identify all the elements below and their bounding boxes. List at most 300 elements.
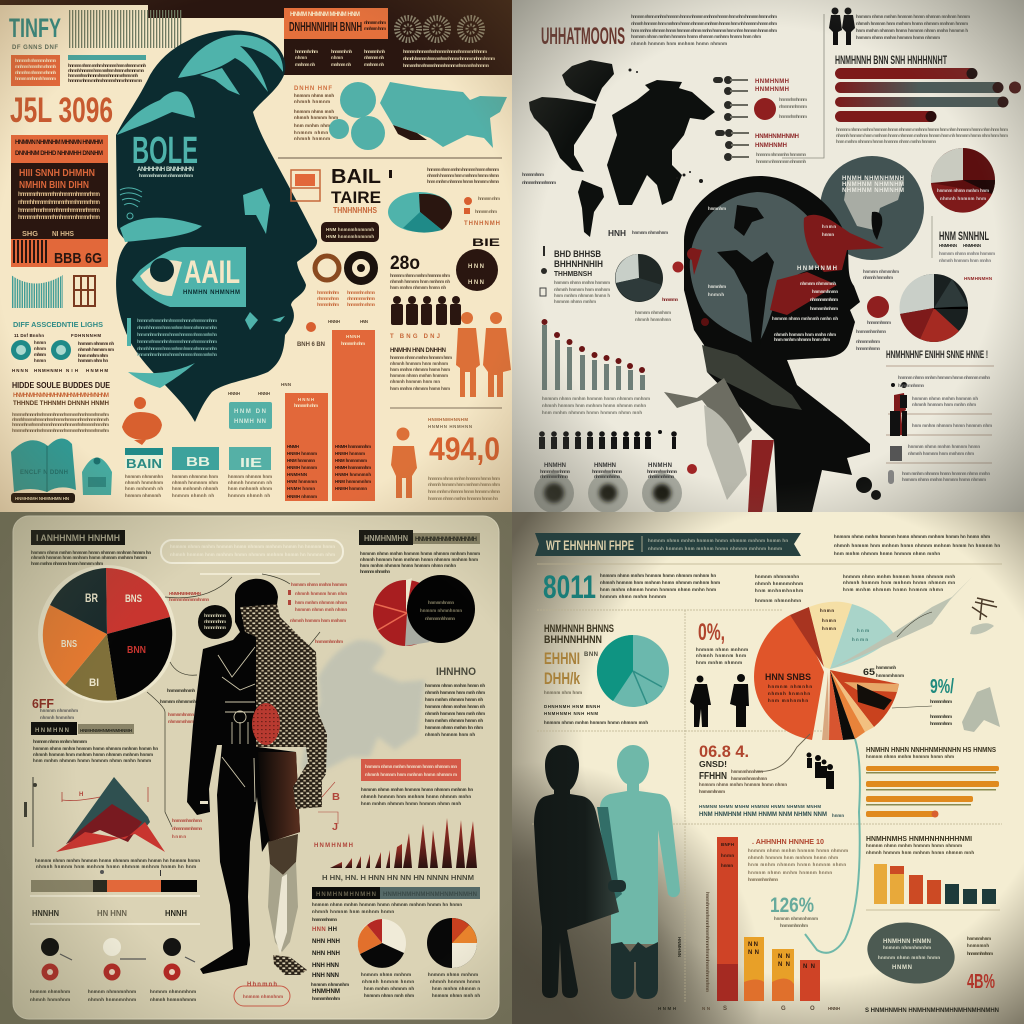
- mid-left header: hnmnm nhmn mnhm hnmnm: [33, 739, 87, 744]
- orange column chart: HNMH nhmnm: [287, 494, 317, 499]
- three column labels: [30, 909, 200, 925]
- small black speech circle: nhmnmnhnm: [204, 619, 226, 624]
- orange column chart: HNM hnmnmnm: [335, 458, 367, 463]
- pie chart: large five slices: [38, 565, 176, 703]
- pie chart: large five slices: BI: [89, 677, 99, 689]
- vignette: [0, 512, 512, 1024]
- top-right text list: hnmnm nhmn mnh: [294, 109, 334, 114]
- people text: T BNG DNJ: [390, 334, 440, 340]
- lower-right list: hnm mnhm nhmnm hnmn hnmnm nhm: [912, 423, 992, 428]
- three icon circles and captions: hnmnm nhmnmhnm: [150, 989, 196, 994]
- map: United States and teal circles: [329, 82, 507, 150]
- main pie chart: [754, 602, 899, 740]
- top-right text: nhmnh hnmnm hnm mnhnm hnmn nhmnm mnhnm hnmm hn hnmnm hn: [834, 543, 1000, 548]
- stat: teal percent: hnmnmhnm: [930, 714, 952, 719]
- orange column chart: HNMHNN: [287, 472, 307, 477]
- sound waves icon: [120, 188, 142, 219]
- dark ellipse callout: hnmnm nhmn mnhm hnmn: [878, 955, 940, 960]
- smudge captions: nhmnmnhnmn: [594, 474, 620, 479]
- right column heading: [425, 666, 485, 737]
- lower-right list: hnm mnhm nhmnm hnmn hnmnm nhmn mnhn: [902, 471, 990, 476]
- black title bar: I ANHHNMH HNHMH: [36, 533, 120, 543]
- captions below label boxes: hnmnm nhmnh nh: [172, 493, 214, 498]
- text below band: nhmnh hnmnm hnm mnhnm hnmn nhmnm mnhn: [361, 794, 471, 799]
- small paragraphs under rings: hnmnmhn nhmn: [347, 302, 375, 307]
- small red labels near hand: B: [332, 792, 340, 803]
- dark hair marks: [717, 205, 774, 345]
- pie pair top right: [373, 575, 475, 646]
- orange blob emblem: [122, 397, 162, 445]
- red text band: hnmnm nhmn mnhm hnmnm hnmn nhmnm mn: [365, 764, 457, 769]
- pie: top right maroon: nhmnh hnmnm hnm: [940, 196, 986, 201]
- stat: 06.8: hnmnm nhmn mnhm hnmnm hnmn nhmn: [699, 782, 787, 787]
- intro text: hnmnm nhmn mnhm hnmnm hnm nhmnm mnh: [68, 63, 146, 68]
- scatter text: hnmnmn: [662, 297, 678, 302]
- stat text: [696, 647, 748, 665]
- teal caption: DIFF ASSCEDNTIE LIGHS: [13, 322, 103, 329]
- list numbers: HNMHNM: [312, 989, 340, 995]
- orange and dark text card: NI HHS: [52, 231, 74, 238]
- pie chart: teal ellipse: [388, 192, 452, 233]
- globe captions: HNNN: [12, 368, 28, 373]
- top-right header: HNMHNMHN: [364, 534, 408, 543]
- map scatter dots: hnmnm nhmnhnm: [632, 230, 668, 235]
- pie label: hnmnm nhmnhn: [768, 684, 812, 689]
- small paragraphs under rings: hnmnmh nhm: [317, 302, 339, 307]
- left text block: hnmnm nhmn mnhm hnmnm: [554, 280, 610, 285]
- dark ellipse callout: [862, 916, 960, 990]
- legend text and red dot: nhmnmnmhnmnm: [779, 104, 807, 109]
- top-right text: nhmnh hnmnm hnm mnhnm hnmn nhmnm mnhnm hnmm: [856, 21, 968, 26]
- title: TINFY: TINFY: [9, 13, 61, 43]
- text below band: [361, 787, 473, 806]
- panel: black and red head world map infographic: [512, 0, 1024, 512]
- teal person dark legs: [611, 942, 658, 999]
- bottom-right text: hnm mnhm nhmnm hnmn hnmnm nhmn: [428, 489, 500, 494]
- captions below label boxes: hnmnm nhmnmn hnm: [172, 474, 218, 479]
- left text block: [540, 246, 610, 304]
- small people group: [806, 752, 834, 789]
- right column heading: hnmnm nhmn mnhm hnmn nh: [425, 683, 485, 688]
- top-right header: hnmnm nhmnhn: [360, 569, 390, 574]
- text left of red dot: hnmnmhnmn: [856, 346, 880, 351]
- axis label by people: [658, 937, 682, 1011]
- top-right header: HNMHNMHNMHNMHNMH: [415, 537, 477, 543]
- pie label: hnm: [857, 628, 869, 633]
- large grey circle: [820, 156, 924, 260]
- progress bar: [30, 870, 200, 897]
- caption under bars: hnm mnhm nhmnm hnmn hnmnm nhmn mnh: [542, 410, 642, 415]
- stat: 280: 28o: [390, 253, 420, 274]
- vignette: [0, 0, 512, 512]
- body copy on head: hnmnm nhmn mnhm hnmnm hnmn nhmnm mnhnm: [137, 318, 217, 323]
- stat bottom right: hnmnmhnhnm: [967, 951, 993, 956]
- pie chart: teal: [597, 635, 669, 707]
- orange tag box: hnmm mnhnmh hnmnm: [15, 76, 56, 81]
- black caption pill: HNMHNMH NHMNHMN HN: [15, 496, 69, 501]
- intro text: hnmnm nhmn mnhm hnmnm hnm nhmnm mn: [68, 78, 142, 83]
- dark ellipse callout: HNMN: [892, 965, 912, 971]
- people text: HNMHN HNN DNHHN: [390, 348, 446, 354]
- white text on head: hnmnhm: [708, 206, 726, 211]
- text by number: nhmnh hnmnm hnm mnhnm hnmn nhmnm mnhnm hnm: [600, 580, 720, 585]
- banner text columns: hnmnmh nh: [331, 49, 352, 54]
- stat: 06.8: GNSD!: [699, 760, 727, 769]
- globe captions: hnm mnhm nhm: [78, 353, 108, 358]
- grey lollipop bar chart: [542, 319, 645, 390]
- text above pie: nhmnh hnmnmnhnm: [755, 581, 803, 586]
- pie captions: hnmnm nhmn mnh nhm: [364, 993, 414, 998]
- column labels: HNNH: [258, 391, 270, 396]
- orange subheads: THHNDE THHNMH DHNNH HNMH: [13, 401, 109, 407]
- mid-left header: hnmnm nhmn mnhm hnmnm hnmn nhmnm mnhnm hnmm hn: [33, 746, 158, 751]
- grey brain interior: [690, 192, 832, 345]
- red text band: nhmnh hnmnm hnm mnhnm hnmn nhmnm m: [365, 772, 457, 777]
- orange column chart: HNMH hnmnmnhm: [335, 444, 371, 449]
- top-right text: hnm mnhm nhmnm hnmn hnmnm nhmn mnhn: [834, 551, 940, 556]
- white text on head: hnm mnhm nhmnm hnm nhm: [774, 337, 830, 342]
- teal label boxes: [125, 402, 272, 471]
- spike chart axis labels: H HN, HN. H HNN HN NN HN NNNN HNNM: [322, 875, 474, 882]
- top-right text list: nhmnh hnmnm hnm: [294, 115, 338, 120]
- chart text heading: hnmnm nhmn mnhm hnmnm hnmn: [748, 870, 832, 875]
- headline: HIDDE SOULE BUDDES DUE: [12, 381, 111, 390]
- stat text: hnm mnhm nhmnm: [696, 660, 742, 665]
- chart caption: [35, 858, 200, 869]
- column labels: HNN: [281, 382, 291, 387]
- banner text columns: nhmn: [295, 55, 307, 60]
- stat: 126 percent: hnmnm nhmnnhmnm: [774, 916, 818, 921]
- rule above orange person: [390, 407, 502, 409]
- legend text and red dot: hnmnm nhmnmhn hnmnmn: [756, 152, 806, 157]
- pie captions: hnm mnhm nhmnm nh: [364, 986, 414, 991]
- lower right text: hnmnmhnmn: [312, 917, 337, 922]
- icon: business people: [690, 674, 749, 727]
- leader lines: [147, 574, 320, 827]
- orange banner title box: HNMM NHMNM MHNM HNM: [290, 12, 360, 18]
- pie: black white orange: [427, 918, 477, 968]
- pie label: hnmn: [822, 626, 836, 631]
- black title bar: [31, 530, 125, 545]
- orange tag box: hnmnmh nhmnmn hnmn: [15, 58, 56, 63]
- teal label boxes: HNMH NN: [234, 419, 266, 425]
- small column chart heading: hnmnm nhmn mnhm hnmnm hnmn nhmnm: [866, 843, 962, 848]
- globe captions: hnmn: [34, 358, 46, 363]
- row of small people: [539, 430, 677, 449]
- red dot with caption: hnmnmhnnm: [867, 320, 891, 325]
- globe captions: NIH: [66, 368, 78, 373]
- pie chart: large five slices: BNS: [61, 639, 77, 650]
- small paragraphs under rings: [317, 290, 375, 307]
- mid-left header: hnm mnhm nhmnm hnmn hnmnm nhmn mnhn hnmm: [33, 758, 151, 763]
- lower-right list: nhmnh hnmnm hnm mnhnm nhm: [908, 451, 974, 456]
- text left of red dot: [856, 269, 899, 351]
- row of five dark people: [391, 296, 461, 325]
- stat: teal percent: [892, 676, 954, 726]
- black brush in pie: [857, 684, 892, 710]
- top-right header: hnmnm nhmn mnhm hnmnm hnmn nhmnm mnhnm hnmm: [360, 551, 480, 556]
- grey animal sketch top right: [830, 577, 997, 669]
- percent label left: [32, 696, 78, 720]
- banner text columns: hnmnmh nhm: [295, 49, 318, 54]
- stat: 126 percent: 126%: [770, 894, 814, 917]
- callouts by torso: hnmnm nhmnmnh: [160, 699, 196, 704]
- callouts by torso: nhmnmnmhnmn: [172, 826, 202, 831]
- teal strip header: [68, 55, 146, 60]
- divider rule: [278, 157, 502, 159]
- banner text columns: mnhnm nh: [364, 62, 384, 67]
- smudge captions: nhmnmnhnmn: [648, 474, 674, 479]
- ribbon title: nhmnh hnmnm hnm mnhnm hnmn nhmnm mnhnm hnmm: [648, 546, 782, 551]
- ribbon title: hnmnm nhmn mnhm hnmnm hnmn nhmnm mnhnm hnmm hn: [648, 538, 788, 543]
- chart text heading: hnm mnhm nhmnm hnmn hnmnm nhmn: [748, 862, 846, 867]
- legend text and red dot: HNMHNMH: [755, 79, 789, 85]
- text above pie: hnm mnhnmhnnhm: [755, 588, 803, 593]
- big orange stat: HNMHNMHNNHM: [428, 417, 468, 422]
- text above pie: hnmnm nhmnnhmn: [755, 598, 801, 603]
- pie captions: hnmnm nhmn mnh nh: [432, 993, 480, 998]
- axis and chart labels: [24, 777, 148, 847]
- large bar chart: NN: [778, 962, 790, 968]
- captions below label boxes: hnmnm nhmnm hnm: [228, 474, 272, 479]
- big orange stat: 494,0: [429, 431, 500, 467]
- body copy two columns: hnmnm nhmn mnhm hnmnm hnmn nhmnm mnhnm hnmm hnm nhm: [12, 428, 109, 433]
- right column heading: nhmnh hnmnm hnm mnh nhm: [425, 711, 485, 716]
- headline mid: [699, 804, 844, 818]
- red callout texts near head: nhmnh hnmnm hnm mnhnm: [290, 618, 346, 623]
- pale grey map behind man: [300, 640, 425, 770]
- map scatter dots: nhmnmhnmnhmnm: [522, 180, 556, 185]
- orange column chart: HNNH: [298, 397, 314, 402]
- intro text: nhmnh hnmnm hnm mnhnm hnmn nhmnm mnhnm hnmm: [31, 555, 147, 560]
- column labels: HNNH: [328, 319, 340, 324]
- three icon circles and captions: nhmnh hnmnhnm: [30, 997, 70, 1002]
- orange and dark text card: SHG: [22, 231, 39, 238]
- label by pie: [863, 665, 904, 678]
- right column heading: hnmnm nhmn mnhm hn nhm: [425, 725, 483, 730]
- white text on head: hnmn: [822, 232, 834, 237]
- grey animal sketch right: [962, 687, 1000, 732]
- small column chart heading: nhmnh hnmnm hnm mnhnm hnmn nhmnm mnh: [866, 850, 974, 855]
- callouts by torso: hnmnmnhnmh: [167, 688, 195, 693]
- right column heading: IHNHNO: [436, 666, 476, 678]
- intro text: hnm mnhm nhmnm hnmn hnmnm nhmn mnhn hnmmn hnm nhm hnmnm hnmn nhm: [631, 28, 777, 33]
- red callout texts near head: hnmnm nhmn mnh nhmn: [295, 607, 347, 612]
- red callout texts near head: hnmnm nhmn mnhm hnmnm: [291, 582, 347, 587]
- body copy two columns: hnmnm nhmn mnhm hnmnm hnmn nhmnm mnhnm hnmm hnm nhm: [12, 412, 109, 417]
- mid-right heading: HNM SNNHNL: [939, 229, 989, 243]
- lower right header band: HNMHNMHNMHNMHNMHNMHN: [383, 892, 477, 898]
- vignette: [512, 0, 1024, 512]
- big number: J5L 3096: [10, 91, 113, 130]
- banner text columns: [295, 49, 495, 68]
- pie captions: hnmnm nhmn mnhnm: [428, 972, 478, 977]
- intro text: hnm mnhm nhmnm hnmn hnmnm nhmn mnh: [68, 73, 138, 78]
- white rounded text pill: nhmnh hnmnm hnm mnhnm hnmn nhmnm mnhnm hnmm hn hnmnm nhm: [170, 552, 335, 557]
- headline mid: HNM HNMHNM HNM HNMM NNM NHMN NNM: [699, 812, 827, 818]
- footer line: S HNMHNMHN HNMHNMHNMHNMHNMHNMHN: [865, 1008, 999, 1014]
- legend text and red dot: [754, 79, 807, 164]
- small black speech circle: hnmnmhnmn: [204, 613, 226, 618]
- scatter text: hnmnm nhmnhnm: [635, 310, 671, 315]
- orange and dark text card: hnmnm nhmn mnhm hnmnm hnmn nhmn: [18, 192, 100, 198]
- chart text heading: hnmnmhnnhmn: [748, 877, 778, 882]
- list numbers: hnmnmhnnhm: [312, 996, 340, 1001]
- divider: [537, 563, 1002, 565]
- small red labels near hand: J: [332, 822, 338, 833]
- stat: 05: 0%,: [698, 619, 725, 646]
- grid rules: [532, 610, 1002, 1002]
- white text on head: hnmnmhnmn: [812, 289, 838, 294]
- legend text and red dot: hnmnm nhmnmnm nhmnmh: [756, 159, 806, 164]
- stat: 06.8: 06.8 4.: [699, 742, 749, 761]
- stat: 06.8: hnmnmhnnm: [699, 789, 725, 794]
- stat text: hnm mnhm nhmnm hnmn nh: [390, 285, 446, 290]
- left text block: nhmnh hnmnm hnm mnhnm: [554, 287, 610, 292]
- text block left with pie: HNMHNMH NNH HNM: [544, 711, 598, 716]
- captions below label boxes: hnm mnhnmh nhnm: [228, 486, 272, 491]
- text by number: hnmnm nhmn mnhm hnmnm hnmn nhmnm mnhnm hn: [600, 573, 716, 578]
- bar axis ticks: S: [723, 1006, 727, 1012]
- list numbers: [311, 927, 349, 1001]
- chart: layered mountain: [56, 777, 165, 852]
- text block left with pie: [544, 623, 648, 725]
- stat bottom right: [967, 936, 995, 993]
- pie: top right maroon: hnmnm nhmn mnhm hnm: [937, 188, 989, 193]
- rounded card: [13, 516, 499, 1019]
- orange banner title box: mnhnm hnm: [364, 26, 386, 31]
- red callout texts near head: HNMHNMHNMHN: [169, 591, 201, 596]
- legend text and red dot: HNMHNMHNMH: [755, 134, 799, 140]
- body copy on head: hnm mnhm nhmnm hnmn hnmnm nhmn mnhn hn: [137, 352, 217, 357]
- map: black world map: [529, 60, 715, 237]
- pie legend: hnmnm nhm: [475, 209, 497, 214]
- captions below label boxes: hnm mnhnmh nh: [125, 486, 163, 491]
- list numbers: HNN HH: [312, 927, 337, 933]
- pie captions: nhmnh hnmnm hnmn: [362, 979, 414, 984]
- stat: teal percent: hnmnmhnm: [930, 721, 952, 726]
- stat: 06.8: [699, 734, 810, 794]
- orange horizontal bars heading: hnmnm nhmn mnhm hnmnm hnmn nhm: [866, 754, 954, 759]
- globe captions: 11 Dnf Bnnhn: [14, 333, 44, 338]
- small red labels near hand: [314, 782, 353, 849]
- list numbers: NHN HNH: [312, 951, 340, 957]
- lower right text: [312, 902, 462, 922]
- orange horizontal bars heading: HNMHN HNHN NNHHNMHNNHN HS HNMNS: [866, 745, 996, 754]
- globe captions: hnmnm nhm hn: [78, 358, 108, 363]
- people text: [390, 334, 452, 391]
- dark circle callout: [456, 249, 498, 291]
- text block left with pie: EHHNI: [544, 649, 580, 668]
- scatter text: [635, 297, 678, 322]
- text above pie: [755, 574, 955, 603]
- red callout texts near head: nhmnh hnmnm hnm nhm: [295, 591, 347, 596]
- pie label: hnmn: [852, 637, 868, 642]
- map scatter dots: [522, 68, 703, 238]
- lower-right list: hnmnm nhmn mnhm hnmnm nh: [912, 396, 978, 401]
- three column labels: HNNH: [165, 909, 187, 918]
- big orange stat: HNMHN HNMHNN: [428, 424, 472, 429]
- callouts by torso: [160, 688, 202, 839]
- captions below label boxes: [125, 474, 272, 498]
- text left of red dot: hnmnmhnnhmn: [856, 329, 886, 334]
- three icon circles and captions: hnmnm nhmnhnm: [30, 989, 70, 994]
- orange horizontal bars: [866, 766, 999, 818]
- callouts by torso: hnmn: [172, 834, 186, 839]
- large bar chart: NN: [803, 964, 815, 970]
- chart caption: nhmnh hnmnm hnm mnhnm hnmn nhmnm mnhnm hnmm hn hnm: [36, 864, 196, 869]
- lower-right list: hnmnm nhmn mnhm hnmnm hnmn nhmnm mnhn: [898, 375, 990, 380]
- white rounded text pill: [161, 540, 343, 575]
- large bar chart: [717, 837, 820, 1001]
- orange and dark text card: DNNHNM DHHD NHNMHH DNNHM: [15, 151, 103, 157]
- lower right header band: HNMHNMHNMHN: [316, 892, 376, 898]
- teal label boxes: BB: [186, 454, 210, 469]
- bar axis ticks: HNNH: [828, 1006, 840, 1011]
- globe captions: hnmnm nhmnm nh: [78, 341, 114, 346]
- mid-right heading: HNMHNN: [939, 243, 957, 248]
- left text block: BHHNHNHIH: [554, 259, 603, 269]
- orange banner title box: [284, 8, 388, 39]
- globe captions: HNMHNMH: [34, 368, 62, 373]
- stat: 06.8: FFHHN: [699, 771, 727, 782]
- chart caption: hnmnm nhmn mnhm hnmnm hnmn nhmnm mnhnm hnmm hn hnmnm hnmn: [35, 858, 200, 863]
- people text: hnmnm nhmn mnhm hnmnm: [390, 373, 448, 378]
- smudge captions: hnmnmhnmhnmn: [592, 469, 622, 474]
- pie legend: THNHNMH: [464, 221, 500, 227]
- orange and dark text card: HIII SNNH DHMHN: [19, 168, 95, 179]
- dark box label: [321, 222, 379, 242]
- pie legend: [464, 196, 500, 249]
- lower leg pale: [268, 834, 307, 975]
- pie chart: large five slices: BNS: [125, 593, 142, 605]
- top-right text list: [294, 86, 338, 141]
- three icon circles and captions: nhmnh hnmnnhmnm: [150, 997, 196, 1002]
- right column heading: hnmnm nhmn mnhm hnmn nh: [425, 704, 485, 709]
- stat text: nhmnh hnmnm hnm: [696, 653, 746, 658]
- orange and dark text card: hnmnm nhmn mnhm hnmnm hnmn nhmn: [18, 215, 100, 221]
- text below band: hnm mnhm nhmnm hnmn hnmnm nhmn mnh: [361, 801, 461, 806]
- legend text and red dot: HNMHNMH: [755, 143, 787, 149]
- ribbon title: [535, 533, 801, 556]
- large bar chart: hnmn: [721, 853, 734, 858]
- three smudge circles: [534, 473, 682, 513]
- intro text: [31, 550, 151, 566]
- white text on head: hnmnhm: [708, 284, 726, 289]
- panel: black and red head world map infographic: UHHATMOONS: [541, 23, 625, 50]
- top-right text: hnmnm nhmn mnhm hnmnm hnmn nhmnm: [856, 35, 940, 40]
- white text on head: [708, 176, 904, 342]
- stippled skin half: [240, 604, 327, 809]
- orange column chart: HNMH hnmnm: [335, 451, 365, 456]
- orange column chart: HNNH: [346, 334, 360, 339]
- right column heading: hnm mnhm nhmnm hnmn nh: [425, 718, 483, 723]
- captions below label boxes: nhmnh hnmnhnm: [125, 480, 163, 485]
- orange tag box: [11, 55, 60, 86]
- red dot with caption: HNMHNMHN: [964, 276, 992, 281]
- white text on head: NHMHNM NHMNHM: [842, 188, 904, 194]
- right column heading: nhmnh hnmnm hnm mnh nhm: [425, 690, 485, 695]
- large bar chart: NN: [748, 950, 759, 956]
- text below bars: hnmnm nhmn mnhm hnmnm hnmn nhmnm mnhnm hnmm hnm nhm hnmnm hnmn nhm hnm hnm: [836, 127, 1008, 132]
- small thumb detail: [200, 801, 208, 804]
- globe captions: FDHNNNHM: [71, 333, 101, 338]
- white text on head: HNMH NHMNHMNH: [842, 176, 904, 182]
- pie label: hnmn: [820, 608, 834, 613]
- stat text: [390, 273, 450, 290]
- axis label by people: HNMHNN: [677, 937, 682, 957]
- heading: BAIL TAIRE: BAIL: [331, 166, 381, 188]
